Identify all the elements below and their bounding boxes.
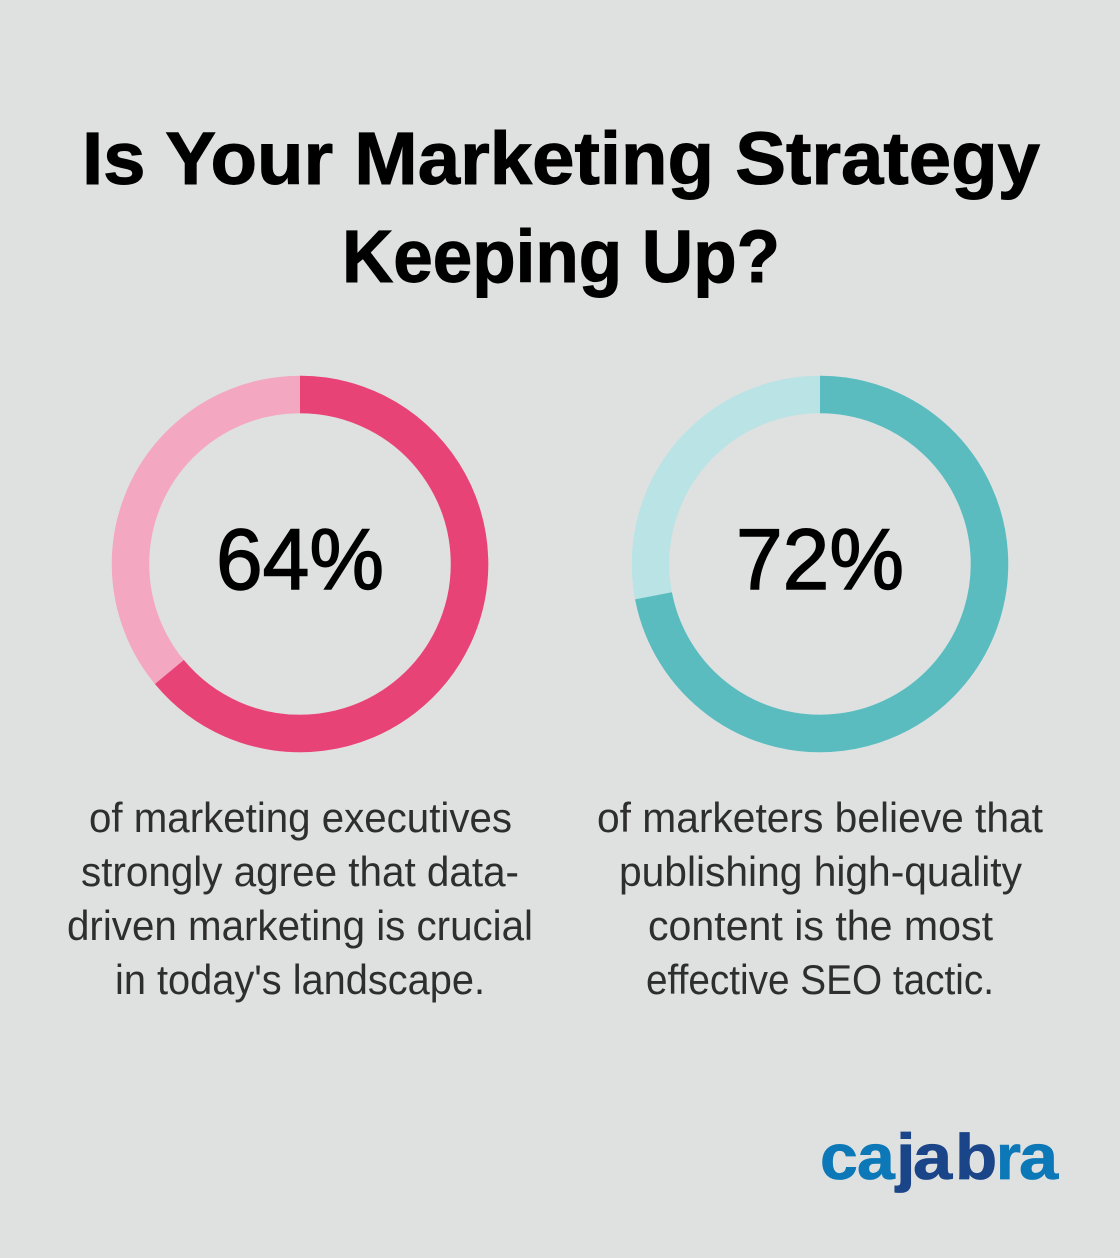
title: Is Your Marketing Strategy (82, 117, 1040, 200)
logo: cajabra: a (913, 1122, 953, 1193)
value: 72%: 72% (736, 512, 904, 608)
description: marketing executives: strongly agree that data- (81, 848, 519, 895)
logo: cajabra: c (820, 1121, 858, 1193)
logo: cajabra (820, 1121, 1059, 1193)
title: Keeping Up? (342, 215, 780, 298)
logo: cajabra: b (955, 1122, 997, 1193)
donut chart: 72% (650, 394, 990, 734)
description: marketers: effective SEO tactic. (646, 956, 994, 1003)
description: marketers (597, 794, 1043, 1003)
panel: 64% statistic (67, 394, 533, 1003)
donut chart: 64% (130, 394, 470, 734)
description: marketers: of marketers believe that (597, 794, 1043, 841)
description: marketing executives: of marketing executives (89, 794, 512, 841)
panel: 72% statistic (597, 394, 1043, 1003)
logo: cajabra: a (1019, 1122, 1059, 1193)
title (82, 117, 1040, 298)
logo: cajabra: r (996, 1121, 1021, 1193)
description: marketing executives: in today's landscape. (115, 956, 485, 1003)
logo: cajabra: a (857, 1121, 896, 1193)
description: marketers: content is the most (648, 902, 993, 949)
value: 64%: 64% (216, 512, 384, 608)
description: marketing executives (67, 794, 533, 1003)
description: marketers: publishing high-quality (619, 848, 1022, 895)
logo: cajabra: j (894, 1121, 916, 1193)
description: marketing executives: driven marketing is crucial (67, 902, 533, 949)
